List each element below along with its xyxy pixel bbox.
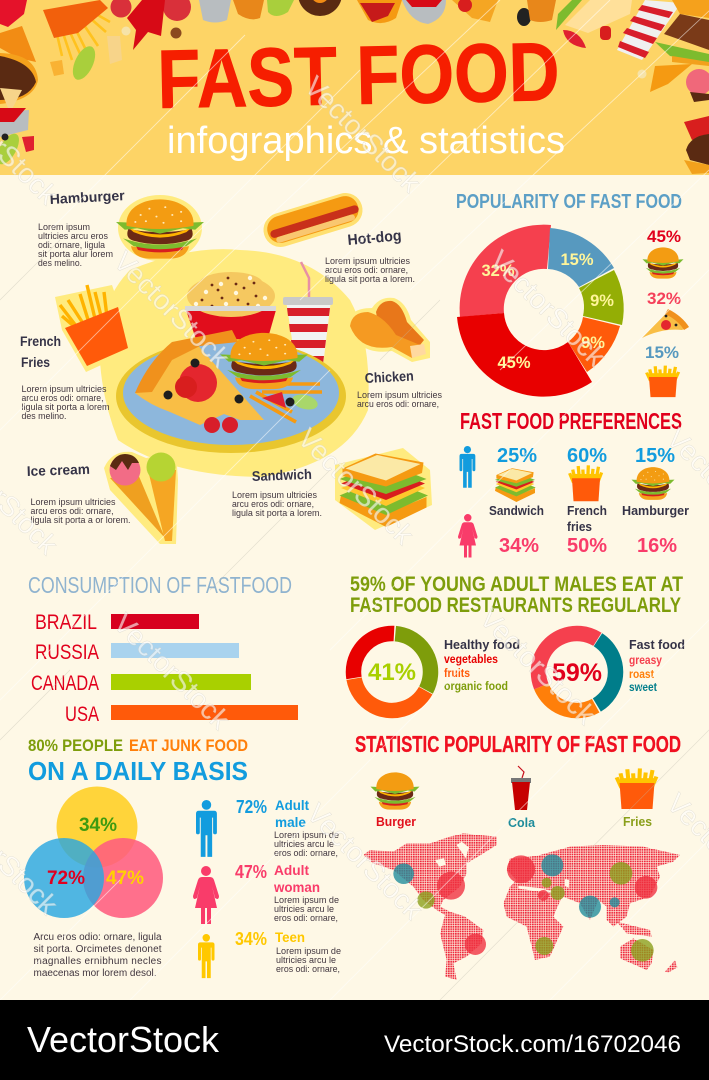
- text: chicken description: [357, 390, 442, 409]
- legend: healthy food: fruits: [444, 666, 470, 680]
- header food border: top-centre group: [199, 0, 556, 26]
- label group: donut percentages: 32%: [481, 262, 515, 280]
- text: ice cream description: Lorem ipsum ultricies: [30, 497, 116, 507]
- text: chicken description: arcu eros odi: ornare,: [357, 399, 439, 409]
- food labels: Hamburger: [622, 503, 689, 518]
- panel: teen: ultricies arcu le: [276, 955, 336, 965]
- legend: fast food: roast: [629, 667, 654, 681]
- chart: consumption bars: CANADA: [31, 672, 99, 695]
- watermark text: VectorStock: [108, 607, 236, 736]
- segment: 15%: [548, 228, 614, 287]
- central yellow splash with fast-food plate: [99, 249, 369, 477]
- panel: adult male: male: [275, 814, 306, 830]
- header food border: top-right group: [556, 0, 709, 174]
- panel: adult woman: [193, 862, 339, 924]
- watermark text: VectorStock: [484, 244, 612, 373]
- chart: consumption bars: RUSSIA: [35, 641, 99, 664]
- panel: adult male: Lorem ipsum de: [274, 830, 339, 840]
- text: french fries description: Lorem ipsum ultricies: [22, 384, 107, 394]
- legend: healthy food: Healthy food: [444, 637, 520, 652]
- heading: 59% of young adult males: [350, 573, 683, 617]
- icon: cucumber slice: [291, 392, 319, 412]
- text: hamburger description: ultricies arcu eros: [38, 231, 108, 241]
- text: sandwich description: [232, 490, 322, 518]
- icon: pizza slice: [135, 330, 264, 433]
- text: ice cream description: [30, 497, 130, 525]
- text: venn description: maecenas mor lorem desol.: [34, 968, 156, 979]
- legend: popularity icons: 45%: [647, 227, 681, 246]
- text: chicken description: Lorem ipsum ultricies: [357, 390, 442, 400]
- chart: dotted world map with bubbles: [363, 833, 680, 980]
- text: hamburger description: [38, 222, 113, 268]
- text: french fries description: des melino.: [22, 411, 66, 421]
- legend: fries: Fries: [623, 814, 652, 829]
- panel: preferences: [458, 445, 689, 558]
- heading: sandwich: Sandwich: [252, 466, 312, 484]
- legend: cola: Cola: [508, 815, 536, 830]
- panel: adult woman: Adult: [274, 862, 309, 878]
- legend: fast food: Fast food: [629, 637, 685, 652]
- text: french fries description: [22, 384, 110, 421]
- heading: 80% people eat junk food: EAT JUNK FOOD: [129, 736, 248, 755]
- legend: fries: [617, 768, 656, 829]
- text: sandwich description: ligula sit porta a lorem.: [232, 508, 322, 518]
- icon: striped cup: [617, 0, 681, 60]
- panel: teen: 34%: [235, 929, 267, 949]
- watermark text: VectorStock: [301, 797, 429, 926]
- icon: popcorn bucket: [185, 272, 276, 345]
- text: hot-dog description: ligula sit porta a lorem.: [325, 274, 415, 284]
- footer bar: [0, 1000, 709, 1080]
- heading: 80% people eat junk food: ON A DAILY BASIS: [28, 756, 248, 786]
- icon: fries on plate: [250, 384, 322, 422]
- chart: fast food donut: [524, 619, 630, 725]
- text: hot-dog description: Lorem ipsum ultricies: [325, 256, 410, 266]
- heading: french fries: French: [20, 333, 61, 349]
- icon: french fries: [55, 285, 134, 372]
- panel: adult male: eros odi: ornare,: [274, 848, 338, 858]
- panel: teen: Teen: [275, 929, 305, 945]
- bubbles: [393, 854, 657, 962]
- panel: adult male: 72%: [236, 797, 267, 817]
- panel: adult male: Adult: [275, 797, 309, 813]
- panel: teen: Lorem ipsum de: [276, 946, 341, 956]
- label group: donut percentages: 9%: [581, 334, 605, 352]
- legend: healthy food: organic food: [444, 679, 508, 693]
- watermark text: VectorStock: [108, 245, 236, 374]
- footer url: VectorStock.com/16702046: [384, 1031, 681, 1058]
- header food border: left-side group: [0, 53, 38, 168]
- chart: venn diagram: 34%: [79, 815, 117, 836]
- lower section start: cream cover under the header: [0, 175, 709, 1000]
- icon: burger on plate: [220, 333, 308, 389]
- footer brand: VectorStock: [27, 1019, 220, 1060]
- heading: consumption of fastfood: CONSUMPTION OF FASTFOOD: [28, 572, 292, 598]
- male percentages: 60%: [567, 445, 607, 467]
- heading: chicken: Chicken: [364, 367, 414, 386]
- heading: hot-dog: Hot-dog: [347, 227, 402, 249]
- legend: burger: Burger: [376, 814, 416, 829]
- heading: ice cream: Ice cream: [27, 461, 90, 479]
- segment: 9% green: [579, 270, 624, 325]
- map: continents: [363, 833, 680, 980]
- segment: 32%: [460, 225, 551, 317]
- panel: teen: eros odi: ornare,: [276, 964, 340, 974]
- legend: burger: [370, 772, 420, 829]
- icon: ice cream cones: [104, 452, 178, 544]
- panel: adult woman: Lorem ipsum de: [274, 895, 339, 905]
- food labels: French: [567, 503, 607, 518]
- legend: fast food: sweet: [629, 680, 657, 694]
- panel: adult woman: ultricies arcu le: [274, 904, 334, 914]
- legend: healthy food: [444, 637, 520, 693]
- chart: fast food donut: 59%: [552, 659, 602, 687]
- watermark text: VectorStock: [299, 70, 427, 199]
- text: french fries description: arcu eros odi: ornare,: [22, 393, 104, 403]
- label group: donut percentages: [481, 251, 614, 372]
- text: venn description: magnalles ernibhum necles: [34, 956, 162, 967]
- text: french fries description: ligula sit porta a lorem: [22, 402, 110, 412]
- text: venn description: Arcu eros odio: ornare, ligula: [34, 932, 162, 943]
- header banner: [0, 0, 709, 175]
- food labels: fries: [567, 519, 592, 534]
- icon: hamburger: [116, 195, 204, 261]
- label group: donut percentages: 9%: [590, 292, 614, 310]
- icon: man: [460, 446, 475, 488]
- female percentages: [499, 535, 677, 557]
- male percentages: [497, 445, 675, 467]
- chart: consumption bars: BRAZIL: [35, 611, 97, 634]
- panel: adult woman: woman: [273, 879, 320, 895]
- icon: hot-dog: [259, 189, 367, 251]
- icon: tomato wedge: [262, 392, 286, 408]
- chart: healthy food donut: 41%: [368, 659, 416, 686]
- chart: venn diagram: [24, 786, 163, 918]
- legend: popularity icons: 32%: [647, 289, 681, 308]
- title: FAST FOOD: [157, 25, 560, 126]
- icon: woman: [458, 514, 478, 558]
- heading: hamburger: Hamburger: [49, 187, 126, 207]
- panel: teen: [198, 929, 341, 978]
- text: hot-dog description: arcu eros odi: ornare,: [325, 265, 408, 275]
- text: sandwich description: arcu eros odi: ornare,: [232, 499, 314, 509]
- chart: venn diagram: 72%: [47, 868, 85, 889]
- watermark text: VectorStock: [474, 602, 602, 731]
- icon: sandwich: [495, 468, 536, 502]
- panel: adult male: [196, 797, 339, 858]
- text: hamburger description: des melino.: [38, 258, 82, 268]
- icon: plate: [116, 339, 346, 453]
- text: hamburger description: odi: ornare, ligula: [38, 240, 105, 250]
- female percentages: 34%: [499, 535, 539, 557]
- chart: venn diagram: 47%: [106, 868, 144, 889]
- panel: adult woman: eros odi: ornare,: [274, 913, 338, 923]
- text: venn description: sit porta. Orcimetes denonet: [34, 944, 162, 955]
- icon: striped cup: [283, 262, 333, 366]
- chart: popularity donut: [457, 225, 624, 397]
- icon: fries: [570, 465, 602, 501]
- male percentages: 25%: [497, 445, 537, 467]
- chart: healthy food donut: [340, 620, 444, 724]
- text: sandwich description: Lorem ipsum ultricies: [232, 490, 317, 500]
- food labels: [489, 503, 689, 534]
- female percentages: 16%: [637, 535, 677, 557]
- text: ice cream description: ligula sit porta a or lorem.: [30, 515, 130, 525]
- heading: french fries: Fries: [21, 354, 50, 370]
- header food border: top-left group: [0, 0, 191, 83]
- heading: 80% people eat junk food: 80% PEOPLE: [28, 736, 123, 755]
- legend: popularity icons: 15%: [645, 343, 679, 362]
- icon: chicken legs: [347, 298, 430, 362]
- legend: popularity icons: [642, 227, 689, 397]
- watermark text: [0, 70, 709, 926]
- segment: 45%: [457, 313, 592, 397]
- panel: adult woman: 47%: [235, 862, 267, 882]
- text: ice cream description: arcu eros odi: ornare,: [30, 506, 114, 516]
- female percentages: 50%: [567, 535, 607, 557]
- legend: fast food: [629, 637, 685, 694]
- label group: donut percentages: 45%: [497, 354, 531, 372]
- text: hot-dog description: [325, 256, 415, 284]
- segment: 9% orange: [568, 317, 620, 372]
- icon: pizza slice: [642, 309, 689, 338]
- subtitle: infographics & statistics: [167, 120, 565, 162]
- watermark text: VectorStock: [292, 422, 420, 551]
- panel: adult male: ultricies arcu le: [274, 839, 334, 849]
- heading: 80% people eat junk food: [28, 736, 248, 786]
- legend: cola: [508, 766, 536, 830]
- text: venn description: [34, 932, 162, 979]
- heading: french fries: [20, 333, 61, 370]
- label group: donut percentages: 15%: [560, 251, 594, 269]
- chart: consumption bars: USA: [65, 703, 99, 726]
- chart: consumption bars: [31, 611, 298, 726]
- icon: sandwich: [335, 448, 432, 530]
- icon: burger: [632, 467, 674, 500]
- male percentages: 15%: [635, 445, 675, 467]
- legend: fast food: greasy: [629, 653, 662, 667]
- food labels: Sandwich: [489, 503, 544, 518]
- text: hamburger description: sit porta alur lorem: [38, 249, 113, 259]
- legend: healthy food: vegetables: [444, 652, 498, 666]
- map: water gaps: [435, 842, 569, 915]
- text: hamburger description: Lorem ipsum: [38, 222, 90, 232]
